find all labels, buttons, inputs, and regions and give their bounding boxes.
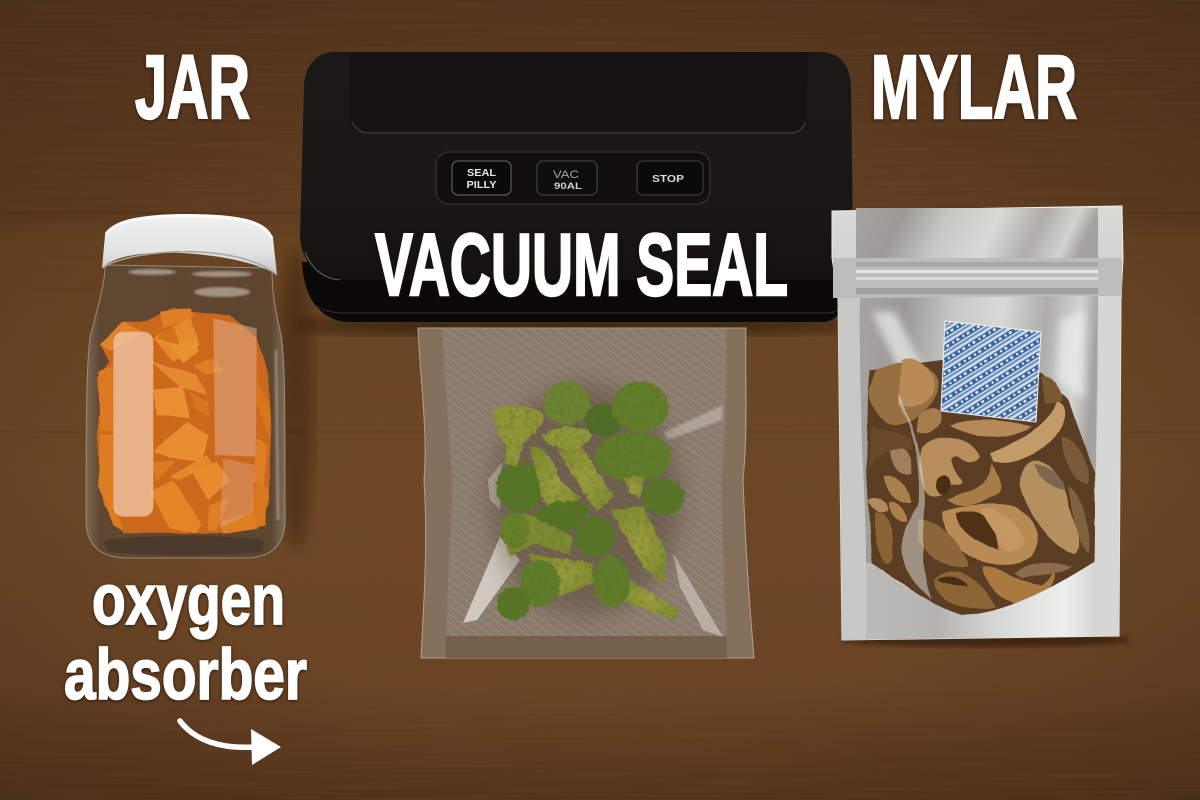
bag outer seal band [418,328,754,658]
jar bottom [103,536,265,555]
button: seal pilly: PILLY [466,180,497,191]
dried carrot pieces [97,308,272,533]
pouch zip seal [833,258,1122,298]
pouch side seals [838,296,1121,640]
arrow: curved pointing right [180,721,281,765]
button: seal pilly [452,161,511,195]
vacuum bag with broccoli [418,328,754,658]
button: stop: STOP [652,174,684,185]
button: stop [637,161,703,195]
label: oxygen absorber [64,561,307,715]
button: vac 90al: 90AL [554,181,582,192]
window foil sheen [872,310,1085,400]
button panel [436,152,710,204]
pouch upper foil [856,208,1098,260]
pouch outer foil [832,206,1123,640]
vacuum sealer machine [295,52,855,335]
dried mushroom slices [867,358,1095,615]
pouch lower foil [842,560,1119,640]
jar of dried carrots [86,214,314,558]
bag highlights [463,405,723,637]
heading: VACUUM SEAL: VACUUM SEAL [375,215,788,314]
heading: JAR: JAR [135,38,250,138]
pouch window [859,296,1098,570]
button: vac 90al [537,161,597,195]
sealer base [302,262,853,322]
sealer lid recess [349,52,808,134]
carrot glass reflections [113,318,257,528]
jar glass body [86,265,285,558]
oxygen absorber packet [941,321,1041,422]
mylar pouch with dried mushrooms [832,206,1130,647]
label: oxygen absorber: absorber [64,636,307,715]
button: seal pilly: SEAL [467,168,496,179]
heading: MYLAR: MYLAR [871,38,1077,138]
button: vac 90al: VAC [553,169,579,181]
dried broccoli [493,382,685,620]
bag embossed inner panel [442,329,727,636]
jar highlights [128,269,278,520]
label: oxygen absorber: oxygen [92,561,285,640]
sealer top shell [300,52,853,280]
jar lid [102,214,277,275]
